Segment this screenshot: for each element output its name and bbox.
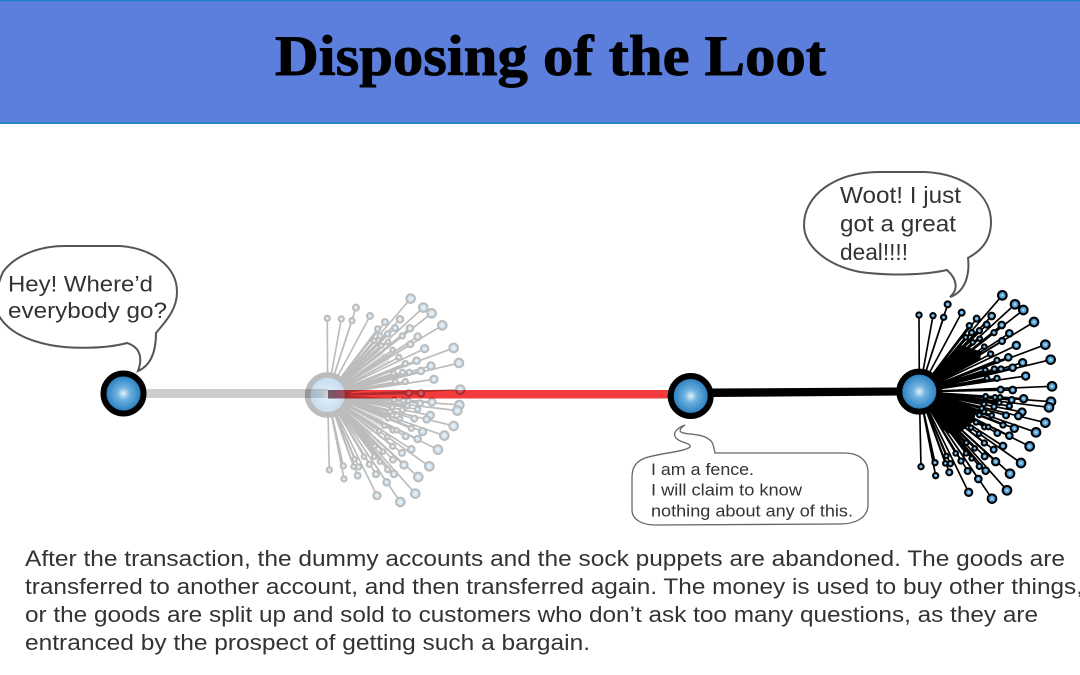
title: Disposing of the Loot (275, 25, 826, 88)
speech bubble: fence: nothing about any of this. (651, 502, 853, 520)
speech bubble: fence: I will claim to know (651, 480, 803, 500)
speech bubble: fence (632, 425, 868, 525)
node: faded fan of abandoned sock puppets (308, 294, 465, 506)
node: fence (671, 376, 711, 416)
speech bubble: customer: Woot! I just (840, 182, 961, 208)
body text: entranced by the prospect of getting such a bargain. (25, 630, 590, 655)
body text (25, 546, 1080, 655)
speech bubble: victim (0, 246, 177, 371)
speech bubble: customer: deal!!!! (840, 239, 908, 265)
speech bubble: customer (804, 172, 991, 297)
link: red connection to the fence (328, 390, 672, 398)
header banner (0, 0, 1080, 124)
link: black connection from the fence (710, 388, 900, 397)
speech bubble: customer: got a great (840, 211, 956, 237)
body text: transferred to another account, and then transferred again. The money is used to buy other things, (25, 574, 1080, 599)
speech bubble: fence: I am a fence. (651, 460, 754, 479)
body text: After the transaction, the dummy accounts and the sock puppets are abandoned. The goods are (25, 546, 1065, 571)
body text: or the goods are split up and sold to customers who don’t ask too many questions, as they are (25, 602, 1038, 627)
speech bubble: victim: everybody go? (8, 298, 167, 323)
speech bubble: victim: Hey! Where’d (8, 272, 153, 296)
node: victim (104, 374, 144, 414)
node: customers fan (899, 291, 1056, 503)
link: gray abandoned connection (144, 389, 328, 398)
